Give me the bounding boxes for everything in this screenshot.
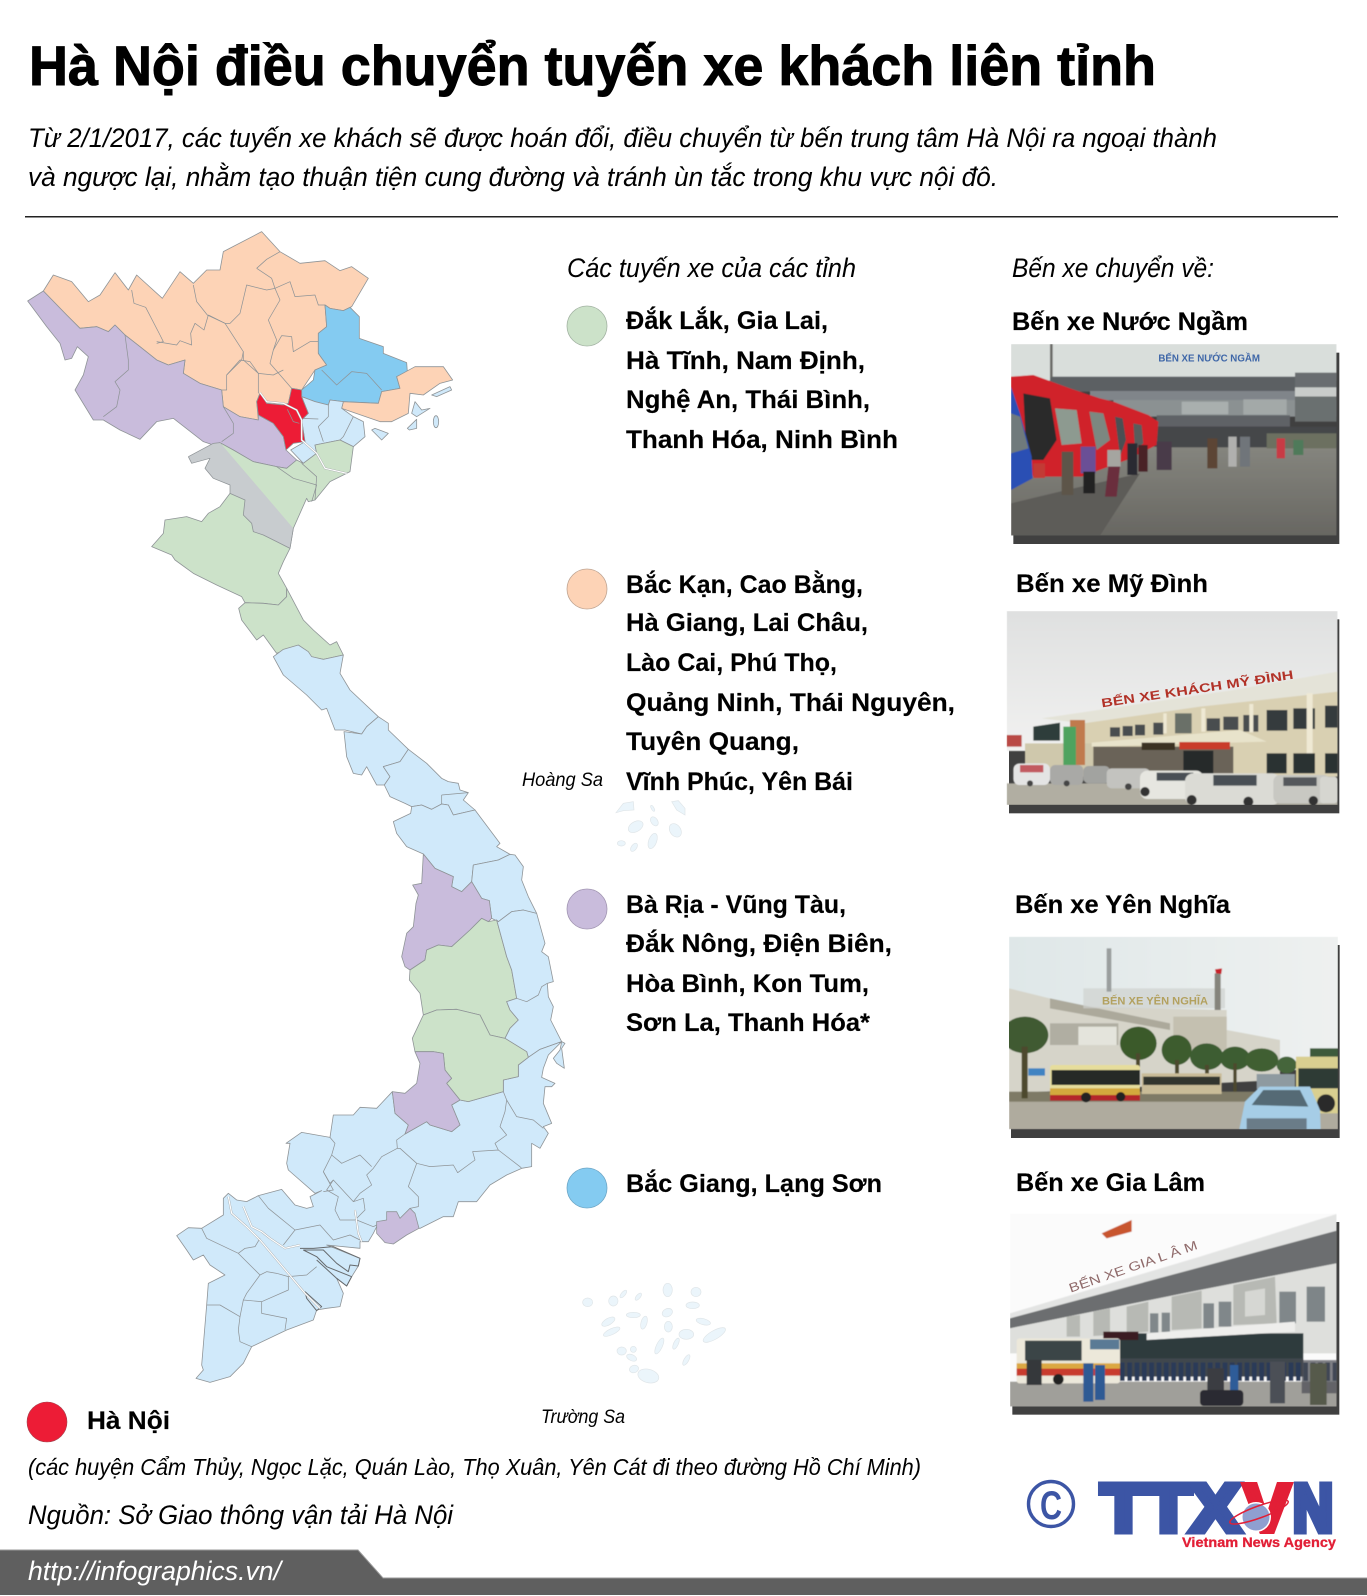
- station photo: Nước Ngầm: BẾN XE NƯỚC NGẦM: [1158, 352, 1260, 365]
- column heading: routes: Các tuyến xe của các tỉnh: [567, 253, 856, 283]
- legend group: orange: Tuyên Quang,: [626, 728, 799, 756]
- intro text: [28, 123, 1217, 192]
- station photo: Yên Nghĩa: BẾN XE YÊN NGHĨA: [1102, 994, 1208, 1007]
- legend group: blue: [567, 1168, 882, 1208]
- legend group: blue: Bắc Giang, Lạng Sơn: [626, 1168, 882, 1198]
- intro text: Từ 2/1/2017, các tuyến xe khách sẽ được hoán đổi, điều chuyển từ bến trung tâm Hà Nội ra ngoại thành: [28, 123, 1217, 153]
- legend group: orange: [567, 569, 955, 796]
- footer bar: http://infographics.vn/: [28, 1556, 283, 1586]
- intro text: và ngược lại, nhằm tạo thuận tiện cung đường và tránh ùn tắc trong khu vực nội đô.: [28, 161, 998, 192]
- label: Hoàng Sa: Hoàng Sa: [522, 770, 603, 791]
- legend group: green: Đắk Lắk, Gia Lai,: [626, 305, 828, 335]
- map: southern provinces: [177, 1009, 565, 1382]
- legend group: green: Nghệ An, Thái Bình,: [626, 386, 870, 414]
- legend group: purple: [567, 889, 892, 1037]
- legend group: purple: Sơn La, Thanh Hóa*: [626, 1009, 870, 1037]
- logo: TTXVN: Vietnam News Agency: [1182, 1535, 1337, 1550]
- legend group: orange: Hà Giang, Lai Châu,: [626, 609, 868, 637]
- logo: TTXVN: [1101, 1471, 1337, 1550]
- legend group: orange: Vĩnh Phúc, Yên Bái: [626, 768, 853, 796]
- legend group: green: [567, 305, 898, 454]
- label: Trường Sa: Trường Sa: [541, 1407, 625, 1428]
- legend group: purple: Bà Rịa - Vũng Tàu,: [626, 891, 846, 919]
- legend group: purple: Đắk Nông, Điện Biên,: [626, 928, 892, 958]
- copyright symbol: [1028, 1482, 1074, 1528]
- logo: TTXVN: V: [1244, 1471, 1290, 1546]
- logo: TTXVN: TTX: [1101, 1471, 1240, 1546]
- footer bar: [0, 1550, 1367, 1595]
- legend group: orange: Lào Cai, Phú Thọ,: [626, 649, 837, 677]
- copyright symbol: C: [1040, 1484, 1062, 1528]
- station photo: Gia Lâm: [1010, 1213, 1339, 1415]
- logo: TTXVN: N: [1293, 1471, 1333, 1546]
- legend group: purple: Hòa Bình, Kon Tum,: [626, 970, 869, 998]
- station photo: Nước Ngầm: [1011, 344, 1339, 544]
- column heading: destination stations: Bến xe chuyển về:: [1012, 253, 1214, 283]
- legend group: green: Thanh Hóa, Ninh Bình: [626, 426, 898, 454]
- legend: Hà Nội: [27, 1402, 170, 1442]
- station heading: Mỹ Đình: Bến xe Mỹ Đình: [1016, 570, 1208, 598]
- station photo: Mỹ Đình: [1007, 611, 1339, 813]
- station heading: Yên Nghĩa: Bến xe Yên Nghĩa: [1015, 891, 1231, 919]
- map of Vietnam: [28, 232, 565, 1382]
- station heading: Nước Ngầm: Bến xe Nước Ngầm: [1012, 308, 1248, 336]
- footnote: (các huyện Cẩm Thủy, Ngọc Lặc, Quán Lào, Thọ Xuân, Yên Cát đi theo đường Hồ Chí Minh): [28, 1454, 921, 1480]
- station photo: Gia Lâm: BẾN XE GIA L Â M: [1067, 1237, 1199, 1295]
- station photo: Yên Nghĩa: [1002, 937, 1340, 1138]
- islands: Hoàng Sa: [616, 801, 685, 853]
- station photo: Mỹ Đình: BẾN XE KHÁCH MỸ ĐÌNH: [1100, 667, 1294, 710]
- source: Nguồn: Sở Giao thông vận tải Hà Nội: [28, 1500, 454, 1530]
- legend group: orange: Bắc Kạn, Cao Bằng,: [626, 569, 863, 599]
- islands: Trường Sa: [583, 1283, 727, 1385]
- map: northern provinces: [28, 232, 453, 659]
- title: Hà Nội điều chuyển tuyến xe khách liên tỉnh: [29, 34, 1156, 97]
- map: central provinces: [273, 645, 562, 1057]
- legend group: orange: Quảng Ninh, Thái Nguyên,: [626, 689, 955, 717]
- station heading: Gia Lâm: Bến xe Gia Lâm: [1016, 1169, 1205, 1197]
- legend: Hà Nội: Hà Nội: [87, 1407, 170, 1435]
- legend group: green: Hà Tĩnh, Nam Định,: [626, 347, 865, 375]
